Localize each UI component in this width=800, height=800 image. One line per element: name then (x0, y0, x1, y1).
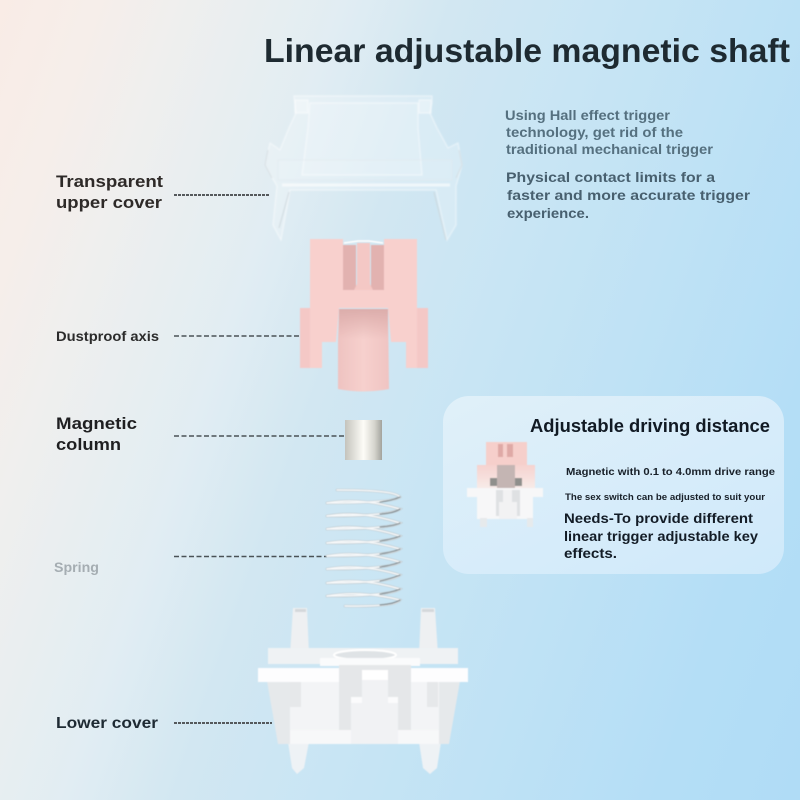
panel line: switch adjustment: The sex switch can be adjusted to suit your (565, 492, 765, 503)
lower cover: centre clip (351, 670, 398, 744)
panel paragraph: effects. (564, 545, 617, 561)
lower cover: side shading (267, 681, 460, 744)
description: second paragraph: faster and more accurate trigger (507, 187, 751, 203)
switch: pins (480, 518, 533, 527)
lower cover: clip shoulder (351, 697, 398, 703)
panel paragraph: linear trigger adjustable key (564, 528, 758, 544)
panel heading: Adjustable driving distance (530, 415, 770, 436)
lower cover: clip top (362, 670, 388, 680)
description: second paragraph (506, 169, 751, 221)
label: transparent upper cover: Transparent (56, 172, 163, 191)
axis: recess (343, 245, 384, 290)
switch: body (467, 488, 543, 519)
label: transparent upper cover (56, 172, 163, 212)
lower cover: main body (290, 681, 439, 744)
lower cover: post tops (295, 609, 434, 612)
icon: pink dustproof axis (300, 239, 428, 392)
switch: stem slots (498, 444, 513, 457)
description text (505, 108, 751, 221)
axis: side tabs (300, 308, 428, 368)
panel background (443, 396, 784, 574)
lower cover: posts (290, 608, 438, 655)
switch: magnets (490, 478, 522, 486)
axis: top highlight (344, 241, 383, 243)
lower cover: slots (290, 682, 438, 707)
leader line: lower cover (174, 722, 272, 724)
icon: assembled switch (467, 442, 543, 527)
description: second paragraph: experience. (507, 205, 589, 221)
lower cover: lower band (290, 730, 439, 744)
icon: magnetic column (345, 420, 382, 460)
lower cover: centre top band (320, 658, 420, 666)
lower cover: centre recess (339, 665, 411, 730)
switch: pink stem (486, 442, 527, 466)
leader line: dustproof axis (174, 335, 299, 337)
panel: adjustable driving distance (443, 396, 784, 574)
label: transparent upper cover: upper cover (56, 193, 162, 212)
label: spring: Spring (54, 559, 99, 575)
panel line: drive range: Magnetic with 0.1 to 4.0mm drive range (566, 466, 775, 478)
description: first paragraph: Using Hall effect trigger (505, 108, 671, 123)
switch: spring core (497, 465, 515, 490)
switch: pink shoulder (477, 465, 535, 489)
lower cover: flange (258, 668, 468, 682)
icon: white lower cover (258, 608, 468, 774)
switch: central clip (499, 490, 517, 519)
icon: spring (327, 490, 400, 606)
panel paragraph: Needs-To provide different (564, 510, 753, 526)
spring: wire shading (380, 497, 400, 605)
description: first paragraph: technology, get rid of the (506, 125, 684, 140)
label: magnetic column: Magnetic (56, 414, 137, 433)
axis: main body (310, 239, 417, 368)
lower cover: pins (288, 742, 441, 774)
panel paragraph (564, 510, 758, 561)
description: first paragraph: traditional mechanical trigger (506, 142, 714, 157)
switch: central channel (496, 490, 520, 516)
axis: cylinder shadow (339, 309, 388, 339)
axis: centre rib (354, 243, 373, 290)
lower cover: round opening (334, 650, 396, 660)
leader line: upper cover (174, 194, 270, 196)
label: dustproof axis: Dustproof axis (56, 328, 159, 344)
description: second paragraph: Physical contact limits for a (506, 169, 715, 185)
spring: wire outline (327, 490, 400, 606)
icon: transparent upper cover (265, 96, 462, 240)
lower cover: back ledge (268, 648, 458, 664)
label: lower cover: Lower cover (56, 715, 158, 732)
leader line: magnetic column (174, 435, 345, 437)
axis: cylinder (338, 309, 389, 392)
spring: light coil wire (327, 490, 400, 606)
title: Linear adjustable magnetic shaft (264, 32, 790, 69)
label: magnetic column: column (56, 435, 121, 454)
description: first paragraph (505, 108, 714, 157)
leader line: spring (174, 556, 327, 558)
label: magnetic column (56, 414, 137, 454)
